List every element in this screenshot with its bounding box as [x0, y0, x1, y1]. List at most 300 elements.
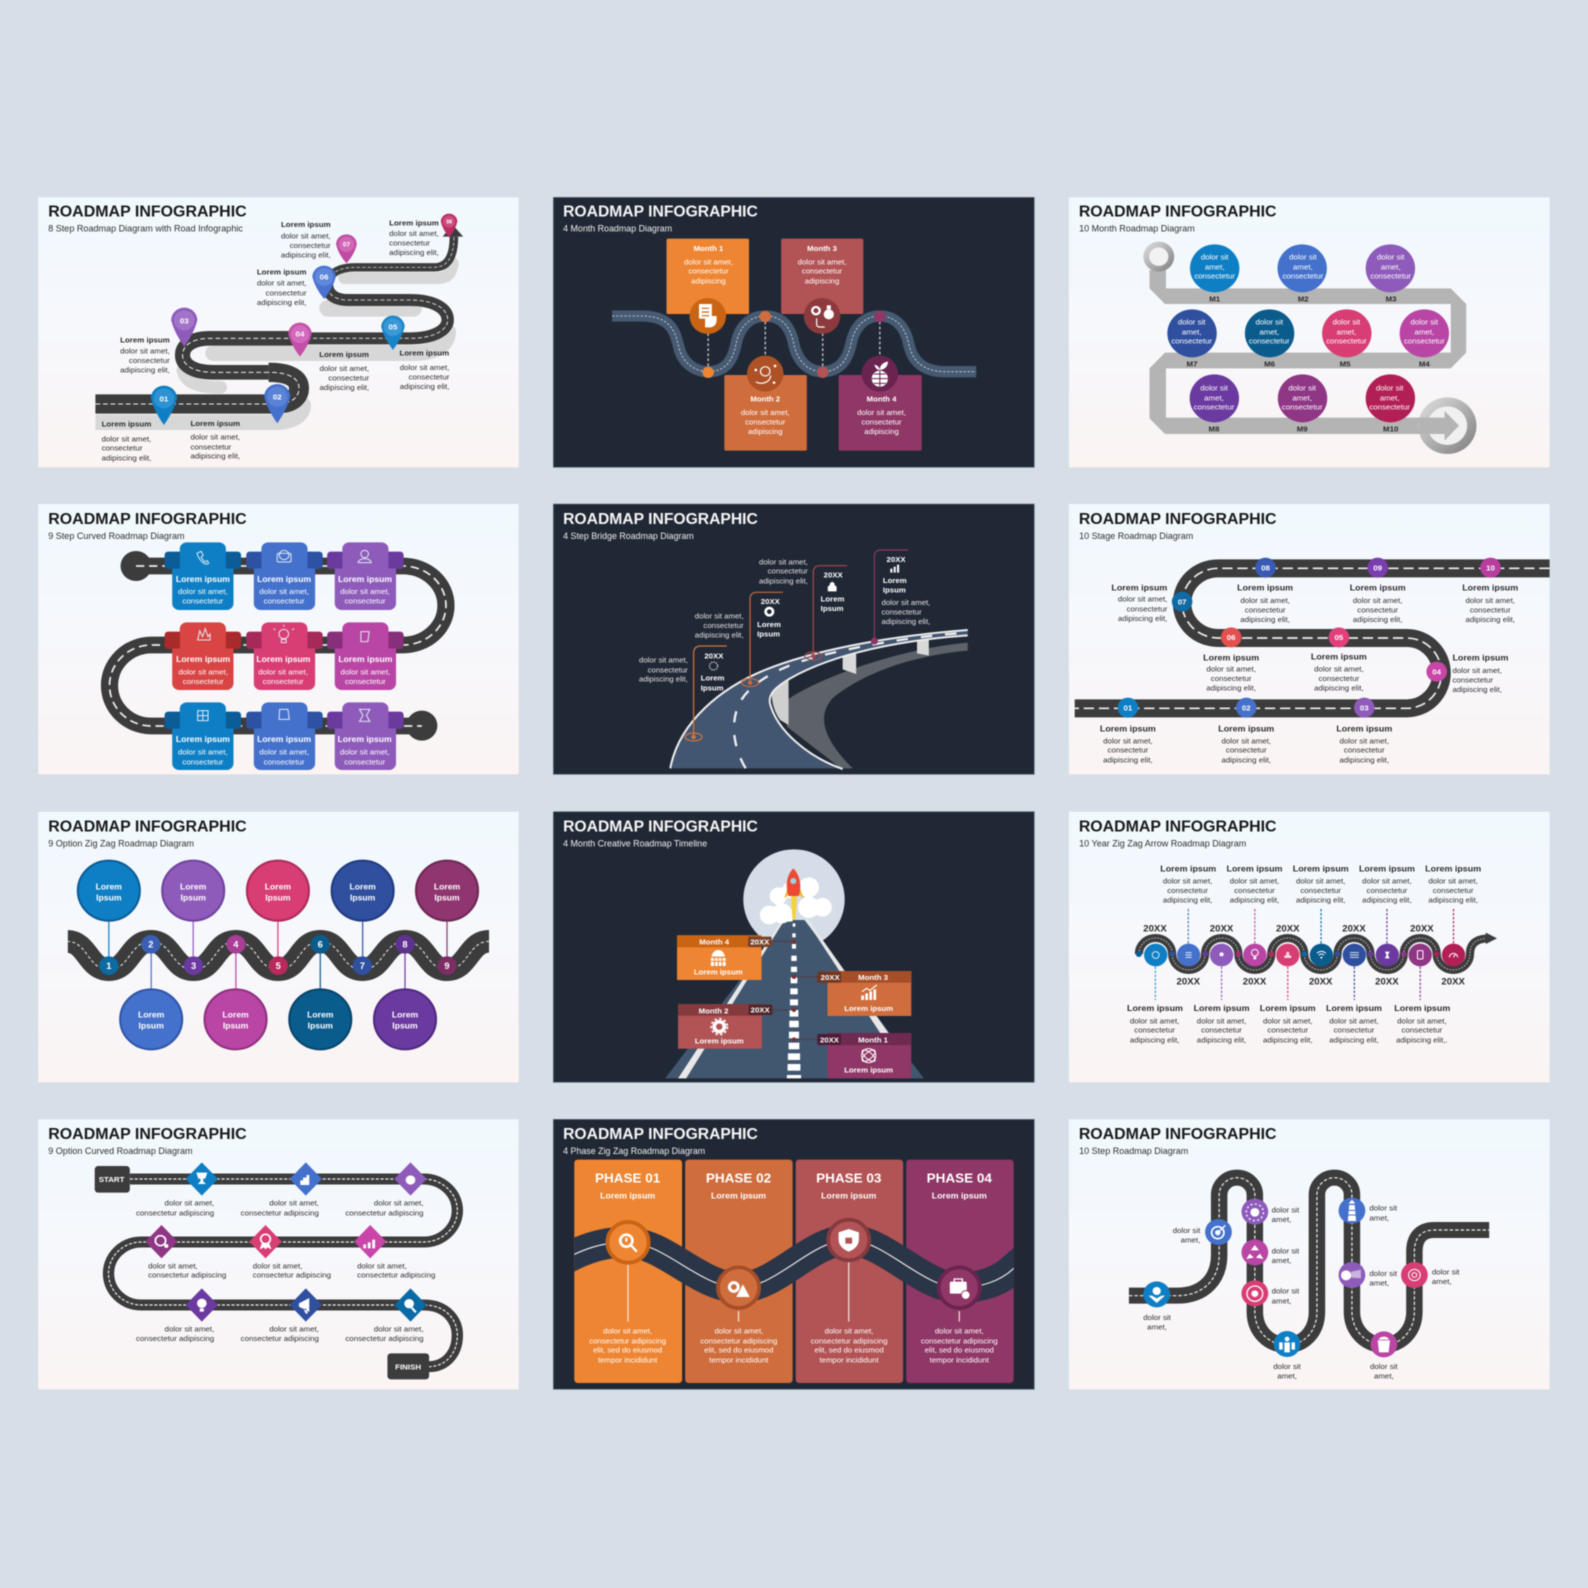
text: 20XX	[761, 597, 781, 606]
month labels	[1187, 294, 1430, 433]
step captions: dolor sit	[1272, 1246, 1300, 1255]
circle text: consectetur	[1404, 337, 1445, 346]
panel: 9 step curved roadmap	[38, 504, 519, 775]
text blocks: adipiscing elit,	[1314, 684, 1364, 693]
panel: 4 step bridge roadmap: 4 Step Bridge Roadmap Diagram	[563, 531, 694, 541]
card text: consectetur	[182, 597, 224, 606]
pin 08	[441, 214, 457, 237]
text blocks: consectetur	[190, 442, 232, 451]
text blocks bottom: adipiscing elit,.	[1396, 1035, 1448, 1044]
stage markers: 02	[1242, 703, 1251, 712]
year labels: 20XX	[1276, 923, 1300, 934]
stage markers: 06	[1227, 633, 1236, 642]
text blocks: Lorem ipsum	[102, 419, 151, 428]
callout 3	[805, 566, 847, 660]
month labels: M5	[1340, 359, 1351, 368]
phase text: tempor incididunt	[598, 1355, 658, 1364]
month 4 box: Month 4	[699, 937, 730, 946]
text blocks: dolor sit amet,	[1222, 736, 1271, 745]
text: Ipsum	[821, 604, 844, 613]
circle labels: Lorem	[180, 881, 206, 891]
text: 20XX	[824, 570, 844, 579]
phase text: PHASE 04	[927, 1171, 992, 1186]
phase text: elit, sed do eiusmod	[704, 1346, 773, 1355]
road deck	[670, 630, 968, 769]
captions: dolor sit amet,	[374, 1199, 424, 1208]
circle text	[1171, 253, 1445, 412]
wavy road	[612, 316, 976, 372]
card text: consectetur	[183, 677, 224, 686]
start badge: START	[99, 1175, 125, 1184]
stage markers: 01	[1124, 703, 1133, 712]
text blocks: dolor sit amet,	[1353, 596, 1402, 605]
start ring	[1143, 242, 1174, 272]
text: adipiscing elit,	[882, 617, 930, 626]
phase text: consectetur adipiscing	[700, 1336, 777, 1345]
road	[1075, 568, 1550, 708]
captions: consectetur adipiscing	[148, 1271, 226, 1280]
month 3 box: Lorem ipsum	[844, 1004, 893, 1013]
dashed leader lines	[1155, 909, 1454, 1000]
text blocks: consectetur	[129, 356, 170, 365]
panel: 10 year zig zag arrow: 10 Year Zig Zag Arrow Roadmap Diagram	[1079, 839, 1246, 849]
text blocks: adipiscing elit,	[257, 298, 307, 307]
month 2 box: 20XX	[751, 1006, 771, 1015]
step captions: dolor sit	[1173, 1226, 1201, 1235]
circle icons	[1152, 949, 1458, 959]
pin 04	[288, 323, 312, 357]
panel: 9 option zig zag: ROADMAP INFOGRAPHIC	[48, 819, 247, 836]
month 2 box: Month 2	[699, 1006, 728, 1015]
step captions: amet,	[1272, 1256, 1291, 1265]
text: Lorem	[821, 594, 845, 603]
circle labels: Ipsum	[181, 892, 206, 902]
panel: 10 stage roadmap: 10 Stage Roadmap Diagram	[1079, 531, 1193, 541]
panel: 4 step bridge roadmap	[552, 503, 1036, 776]
text blocks: consectetur	[1470, 606, 1511, 615]
circle text: consectetur	[1194, 403, 1235, 412]
card text: dolor sit amet,	[259, 587, 309, 596]
panel: 10 stage roadmap	[1068, 504, 1550, 775]
panel: 10 year zig zag arrow: ROADMAP INFOGRAPHIC	[1079, 819, 1277, 836]
labels: Month 3	[807, 244, 838, 253]
text: Ipsum	[757, 630, 780, 639]
phase text: dolor sit amet,	[603, 1327, 652, 1336]
text blocks: Lorem ipsum	[1462, 583, 1518, 593]
small numbered nodes: 4	[233, 940, 239, 950]
captions: consectetur adipiscing	[253, 1271, 331, 1280]
text: dolor sit amet,	[639, 656, 688, 665]
text blocks bottom: adipiscing elit,	[1197, 1035, 1246, 1044]
circle text: dolor sit	[1200, 384, 1229, 393]
labels: Month 4	[867, 394, 897, 403]
text blocks: dolor sit amet,	[190, 433, 240, 442]
circle labels: Lorem	[96, 881, 122, 891]
panel: 4 month roadmap: ROADMAP INFOGRAPHIC	[563, 204, 758, 221]
step captions: dolor sit	[1369, 1204, 1398, 1213]
month 3 box: Month 3	[858, 973, 889, 982]
panel: 9 option curved roadmap: 9 Option Curved Roadmap Diagram	[48, 1146, 193, 1156]
card text: consectetur	[344, 757, 386, 766]
month labels: M4	[1419, 359, 1430, 368]
circle text: consectetur	[1249, 337, 1290, 346]
year labels: 20XX	[1410, 923, 1434, 934]
circle text: amet,	[1182, 327, 1202, 336]
text blocks: consectetur	[1357, 606, 1398, 615]
text blocks: dolor sit amet,	[1340, 736, 1389, 745]
text blocks: consectetur	[328, 373, 370, 382]
stage markers: 07	[1178, 597, 1186, 606]
step captions: dolor sit	[1370, 1362, 1398, 1371]
card text: consectetur	[182, 757, 224, 766]
callout 2	[742, 592, 783, 687]
circle text: amet,	[1337, 327, 1356, 336]
small numbered nodes	[99, 935, 457, 975]
connectors	[628, 1262, 959, 1322]
text blocks top: adipiscing elit,	[1230, 896, 1279, 905]
labels	[684, 244, 906, 436]
phase text	[589, 1171, 998, 1364]
step captions: dolor sit	[1272, 1205, 1300, 1214]
pin 02	[264, 384, 290, 423]
panel: 9 option zig zag: 9 Option Zig Zag Roadmap Diagram	[48, 839, 194, 849]
text blocks	[102, 218, 450, 462]
small numbered nodes: 5	[276, 961, 281, 971]
text blocks top: dolor sit amet,	[1230, 876, 1279, 885]
text blocks bottom	[1127, 1003, 1450, 1044]
circle labels: Ipsum	[139, 1020, 164, 1030]
year labels: 20XX	[1243, 976, 1267, 987]
grey ribbon path	[1150, 270, 1466, 434]
text blocks: Lorem ipsum	[1336, 724, 1392, 734]
month 3 box	[817, 971, 911, 1016]
step captions: dolor sit	[1432, 1267, 1460, 1276]
text: Ipsum	[701, 683, 724, 692]
text blocks bottom: adipiscing elit,	[1329, 1035, 1379, 1044]
stage markers: 03	[1360, 703, 1369, 712]
labels: consectetur	[745, 417, 786, 426]
captions: consectetur adipiscing	[136, 1334, 214, 1343]
month labels: M7	[1187, 359, 1198, 368]
panel: 10 stage roadmap: ROADMAP INFOGRAPHIC	[1079, 511, 1277, 528]
phase text: elit, sed do eiusmod	[815, 1346, 884, 1355]
text: 20XX	[887, 555, 906, 564]
card text: Lorem ipsum	[176, 734, 230, 744]
circle text: amet,	[1414, 327, 1434, 336]
panel: 4 month roadmap	[552, 196, 1036, 468]
small numbered nodes: 1	[106, 961, 111, 971]
text: Lorem	[883, 576, 907, 585]
year labels	[1143, 923, 1466, 987]
labels: dolor sit amet,	[798, 257, 846, 266]
labels: adipiscing	[748, 427, 783, 436]
text blocks: Lorem ipsum	[257, 267, 307, 276]
panel: 10 year zig zag arrow	[1068, 812, 1550, 1083]
captions: dolor sit amet,	[148, 1261, 198, 1270]
pin 08: 08	[446, 220, 452, 226]
panel: 4 month creative timeline: ROADMAP INFOGRAPHIC	[563, 819, 758, 836]
text blocks top: adipiscing elit,	[1428, 896, 1478, 905]
circle text: amet,	[1204, 393, 1224, 402]
text blocks: adipiscing elit,	[281, 251, 331, 260]
text blocks: adipiscing elit,	[1465, 615, 1515, 624]
month labels: M10	[1383, 424, 1398, 433]
text blocks top: Lorem ipsum	[1160, 863, 1216, 873]
labels: adipiscing	[691, 276, 726, 285]
phase text: consectetur adipiscing	[921, 1336, 998, 1345]
month labels: M8	[1209, 424, 1220, 433]
text blocks: adipiscing elit,	[102, 453, 151, 462]
card icons	[197, 550, 371, 721]
panel: 8 step road roadmap	[38, 197, 519, 468]
month 1 box: Lorem ipsum	[844, 1065, 893, 1074]
text blocks: dolor sit amet,	[1465, 596, 1515, 605]
moon	[743, 849, 845, 949]
circle labels: Lorem	[265, 881, 291, 891]
text: consectetur	[648, 665, 688, 674]
panel: 4 month creative timeline: 4 Month Creative Roadmap Timeline	[563, 839, 707, 849]
text blocks: dolor sit amet,	[389, 229, 439, 238]
text blocks: consectetur	[102, 444, 143, 453]
text blocks: dolor sit amet,	[257, 279, 307, 288]
diamonds	[145, 1162, 427, 1322]
card text: Lorem ipsum	[257, 574, 311, 584]
circle text: dolor sit	[1289, 253, 1318, 262]
small numbered nodes: 3	[191, 961, 196, 971]
small numbered nodes: 9	[444, 961, 450, 971]
circle text: consectetur	[1283, 272, 1324, 281]
month 2 box: Lorem ipsum	[695, 1036, 744, 1045]
text blocks: dolor sit amet,	[1240, 596, 1290, 605]
circle text: dolor sit	[1411, 318, 1439, 327]
text: consectetur	[703, 621, 744, 630]
pin 03: 03	[180, 316, 189, 325]
text blocks: consectetur	[266, 288, 307, 297]
circle text: amet,	[1380, 393, 1400, 402]
panel: 4 phase zig zag: 4 Phase Zig Zag Roadmap Diagram	[563, 1146, 705, 1156]
circle labels: Ipsum	[434, 892, 460, 902]
text blocks: adipiscing elit,	[400, 382, 449, 391]
text blocks: consectetur	[1319, 674, 1360, 683]
stage markers: 04	[1432, 667, 1442, 676]
text blocks bottom: consectetur	[1201, 1026, 1242, 1035]
year labels: 20XX	[1342, 923, 1366, 934]
text blocks bottom: Lorem ipsum	[1260, 1003, 1316, 1013]
panel: 8 step road roadmap: 8 Step Roadmap Diagram with Road Infographic	[48, 224, 243, 234]
phase columns	[574, 1160, 1014, 1383]
panel: 9 step curved roadmap: 9 Step Curved Roadmap Diagram	[48, 531, 185, 541]
text blocks bottom: consectetur	[1402, 1026, 1443, 1035]
text blocks top: adipiscing elit,	[1163, 896, 1212, 905]
year labels: 20XX	[1143, 923, 1167, 934]
text: Ipsum	[883, 586, 906, 595]
text blocks top: consectetur	[1367, 886, 1408, 895]
pin 01	[151, 386, 177, 425]
panel: 10 step roadmap: 10 Step Roadmap Diagram	[1079, 1146, 1188, 1156]
stage markers: 09	[1373, 563, 1383, 572]
circle labels: Ipsum	[308, 1020, 333, 1030]
text blocks bottom: Lorem ipsum	[1326, 1003, 1382, 1013]
panel: 4 phase zig zag: ROADMAP INFOGRAPHIC	[563, 1126, 758, 1143]
text blocks: dolor sit amet,	[1103, 736, 1153, 745]
text blocks bottom: adipiscing elit,	[1263, 1035, 1313, 1044]
text blocks: consectetur	[1452, 675, 1494, 684]
bridge understructure	[772, 640, 968, 768]
text blocks top: consectetur	[1167, 886, 1208, 895]
text blocks bottom: adipiscing elit,	[1130, 1035, 1179, 1044]
captions: dolor sit amet,	[165, 1199, 214, 1208]
text blocks top: adipiscing elit,	[1362, 896, 1412, 905]
card text: consectetur	[345, 677, 386, 686]
card text: consectetur	[345, 597, 386, 606]
month 4 box: 20XX	[750, 938, 770, 947]
phase text: consectetur adipiscing	[811, 1336, 888, 1345]
phase text: tempor incididunt	[819, 1355, 880, 1364]
circle text: consectetur	[1194, 272, 1235, 281]
captions: dolor sit amet,	[165, 1325, 214, 1334]
text blocks: Lorem ipsum	[1100, 724, 1156, 734]
text: dolor sit amet,	[759, 557, 808, 566]
text: dolor sit amet,	[882, 598, 930, 607]
text blocks bottom: consectetur	[1267, 1026, 1309, 1035]
circle text: consectetur	[1171, 337, 1212, 346]
circle text: amet,	[1205, 262, 1225, 271]
text blocks top	[1160, 863, 1481, 905]
card row 2	[165, 622, 404, 690]
text blocks: Lorem ipsum	[1311, 652, 1367, 662]
card text: Lorem ipsum	[256, 654, 310, 664]
card text: dolor sit amet,	[178, 748, 228, 757]
text blocks: adipiscing elit,	[1222, 755, 1271, 764]
labels: dolor sit amet,	[684, 257, 733, 266]
stage markers: 10	[1486, 563, 1495, 572]
text blocks: consectetur	[1108, 746, 1149, 755]
month boxes	[667, 239, 922, 451]
month labels: M1	[1209, 294, 1221, 303]
year labels: 20XX	[1177, 976, 1201, 987]
text blocks: adipiscing elit,	[1240, 615, 1290, 624]
phase text: dolor sit amet,	[825, 1327, 873, 1336]
text blocks: adipiscing elit,	[1206, 684, 1256, 693]
card text: Lorem ipsum	[176, 654, 230, 664]
text blocks: Lorem ipsum	[281, 220, 331, 229]
connectors and dots	[708, 317, 880, 372]
circle labels: Ipsum	[96, 892, 122, 902]
text blocks: consectetur	[389, 239, 430, 248]
panel: 10 step roadmap	[1068, 1119, 1550, 1390]
captions: consectetur adipiscing	[241, 1208, 319, 1217]
panel: 4 month roadmap: 4 Month Roadmap Diagram	[563, 224, 672, 234]
card text: Lorem ipsum	[338, 734, 392, 744]
phase icons	[620, 1229, 970, 1299]
captions: consectetur adipiscing	[345, 1334, 424, 1343]
road arrow	[1136, 933, 1497, 970]
text blocks bottom: consectetur	[1334, 1026, 1375, 1035]
small numbered nodes: 6	[318, 940, 323, 950]
text blocks: Lorem ipsum	[1350, 583, 1406, 593]
card text: Lorem ipsum	[176, 574, 230, 584]
panel: 4 step bridge roadmap: ROADMAP INFOGRAPHIC	[563, 511, 758, 528]
phase text: Lorem ipsum	[821, 1190, 877, 1200]
step captions: amet,	[1369, 1213, 1389, 1222]
pin 07	[336, 234, 357, 263]
text blocks top: consectetur	[1234, 886, 1275, 895]
labels: consectetur	[861, 417, 902, 426]
phase text: tempor incididunt	[709, 1355, 769, 1364]
text blocks top: consectetur	[1300, 886, 1341, 895]
step captions: dolor sit	[1272, 1287, 1300, 1296]
phase text: consectetur adipiscing	[589, 1336, 666, 1345]
text blocks: consectetur	[1344, 746, 1385, 755]
text blocks: dolor sit amet,	[1452, 666, 1502, 675]
phase text: Lorem ipsum	[600, 1190, 655, 1200]
phase text: dolor sit amet,	[714, 1327, 763, 1336]
month labels: M2	[1298, 294, 1309, 303]
text blocks: Lorem ipsum	[1237, 583, 1293, 593]
month 4 box	[677, 935, 772, 980]
text: adipiscing elit,	[695, 631, 744, 640]
card text: dolor sit amet,	[340, 748, 390, 757]
circle text: dolor sit	[1201, 253, 1229, 262]
start badge	[95, 1166, 130, 1193]
labels: Month 2	[750, 394, 780, 403]
icon: gears	[804, 298, 840, 334]
text blocks bottom: Lorem ipsum	[1394, 1003, 1450, 1013]
text blocks top: dolor sit amet,	[1163, 876, 1212, 885]
panel: 4 month creative timeline	[552, 810, 1036, 1084]
text blocks: Lorem ipsum	[319, 350, 369, 359]
circle text: amet,	[1259, 327, 1279, 336]
step captions: amet,	[1369, 1279, 1389, 1288]
rocket	[784, 868, 804, 920]
panel: 8 step road roadmap: ROADMAP INFOGRAPHIC	[48, 204, 247, 221]
card text: dolor sit amet,	[259, 748, 309, 757]
callout 4	[871, 550, 908, 644]
circle text: dolor sit	[1255, 318, 1284, 327]
text blocks bottom: dolor sit amet,	[1397, 1016, 1447, 1025]
circle labels: Lorem	[349, 881, 376, 891]
month labels: M9	[1297, 424, 1308, 433]
labels: consectetur	[802, 267, 843, 276]
step captions	[1143, 1204, 1460, 1381]
pin 06	[312, 266, 336, 299]
step captions: amet,	[1432, 1277, 1452, 1286]
card text: consectetur	[264, 757, 305, 766]
text blocks bottom: dolor sit amet,	[1197, 1016, 1246, 1025]
small numbered nodes: 2	[148, 940, 153, 950]
text blocks bottom: consectetur	[1134, 1026, 1175, 1035]
step captions: amet,	[1272, 1296, 1291, 1305]
step icons	[1148, 1200, 1420, 1352]
text blocks top: Lorem ipsum	[1359, 863, 1415, 873]
icon: globe plant	[862, 356, 898, 392]
text: Lorem	[757, 620, 781, 629]
text blocks: adipiscing elit,	[1118, 614, 1167, 623]
text blocks: dolor sit amet,	[1118, 595, 1167, 604]
step captions: dolor sit	[1143, 1313, 1172, 1322]
pin 01: 01	[160, 394, 169, 403]
text blocks bottom: dolor sit amet,	[1130, 1016, 1179, 1025]
icon: document hand	[690, 298, 726, 334]
pin 07: 07	[343, 242, 351, 249]
month 3 box: 20XX	[821, 973, 841, 982]
phase text: PHASE 01	[595, 1171, 661, 1186]
text blocks: adipiscing elit,	[320, 383, 369, 392]
text blocks: Lorem ipsum	[1203, 653, 1259, 663]
text blocks top: dolor sit amet,	[1296, 876, 1345, 885]
small numbered nodes: 7	[360, 961, 365, 971]
card text	[176, 574, 392, 766]
